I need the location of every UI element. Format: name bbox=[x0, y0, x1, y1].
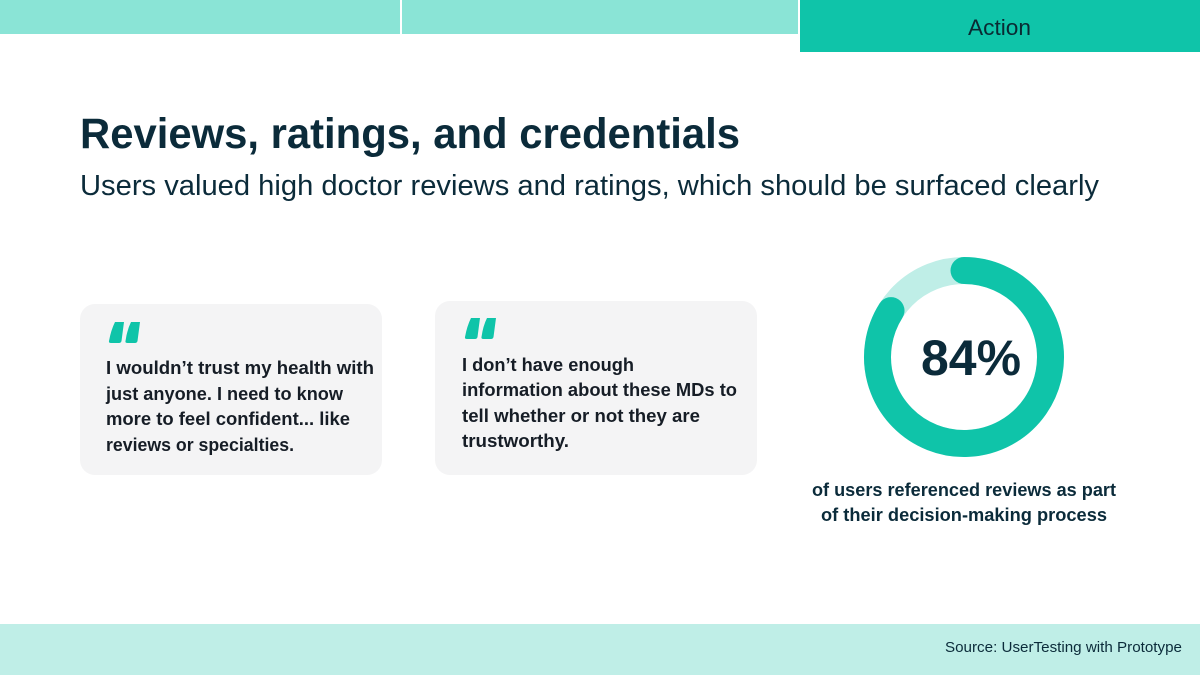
donut chart: 84% bbox=[878, 270, 1051, 444]
title: Reviews, ratings, and credentials bbox=[80, 110, 740, 158]
quote text: trustworthy. bbox=[462, 430, 569, 451]
icon: quote mark bbox=[465, 318, 496, 339]
quote text bbox=[105, 357, 374, 455]
panel: quote two bbox=[435, 301, 757, 475]
quote text: I don’t have enough bbox=[462, 354, 634, 375]
quote text bbox=[462, 354, 737, 451]
stat caption: of their decision-making process bbox=[821, 505, 1107, 525]
tab: second step bbox=[402, 0, 798, 34]
stat caption bbox=[812, 480, 1116, 525]
quote text: information about these MDs to bbox=[462, 379, 737, 400]
quote text: reviews or specialties. bbox=[106, 434, 294, 455]
subtitle: Users valued high doctor reviews and ratings, which should be surfaced clearly bbox=[80, 170, 1099, 202]
tab: action bbox=[800, 0, 1200, 52]
navigation tabs bbox=[0, 0, 1200, 52]
icon: quote mark bbox=[109, 322, 140, 343]
quote text: more to feel confident... like bbox=[106, 408, 350, 429]
quote text: tell whether or not they are bbox=[462, 405, 700, 426]
footer band bbox=[0, 624, 1200, 675]
stat value: 84% bbox=[921, 330, 1021, 386]
stat caption: of users referenced reviews as part bbox=[812, 480, 1116, 500]
quote text: just anyone. I need to know bbox=[105, 383, 344, 404]
source note: Source: UserTesting with Prototype bbox=[945, 639, 1182, 656]
panel: quote one bbox=[80, 304, 382, 475]
quote text: I wouldn’t trust my health with bbox=[106, 357, 374, 378]
tab: action: Action bbox=[968, 15, 1031, 40]
tab: first step bbox=[0, 0, 400, 34]
